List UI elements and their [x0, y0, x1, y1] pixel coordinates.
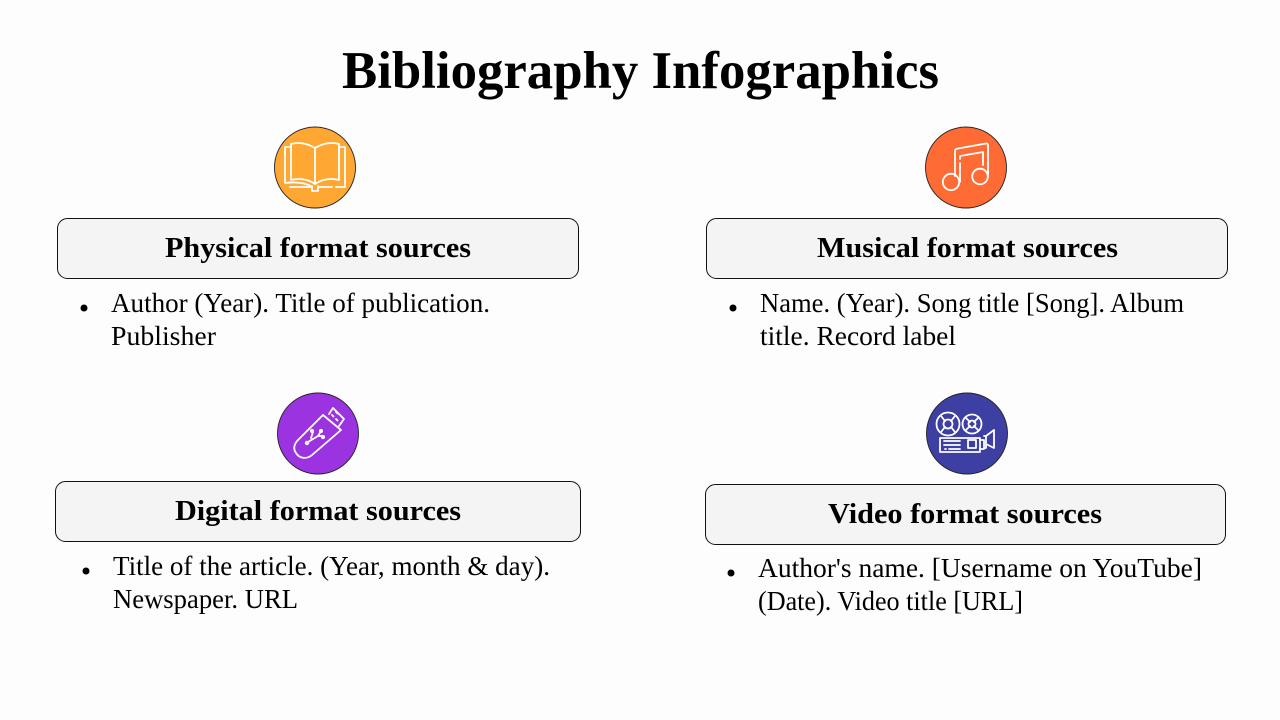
- heading box: Physical format sources: [165, 232, 471, 264]
- heading box: [56, 482, 580, 542]
- bullet text: (Date). Video title [URL]: [758, 586, 1023, 616]
- heading box: [706, 218, 1228, 278]
- panel: video format sources: [706, 393, 1226, 616]
- heading box: Musical format sources: [817, 232, 1118, 264]
- bullet text: Title of the article. (Year, month & day).: [113, 551, 550, 581]
- bullet text: Name. (Year). Song title [Song]. Album: [760, 288, 1184, 318]
- bullet text: [82, 551, 550, 614]
- bullet text: Author's name. [Username on YouTube]: [758, 553, 1202, 583]
- title: Bibliography Infographics: [342, 42, 939, 100]
- panel: digital format sources: [56, 393, 580, 614]
- panel: musical format sources: [706, 127, 1228, 351]
- panel: physical format sources: [58, 127, 578, 351]
- icon: film projector: [926, 393, 1008, 474]
- bullet text: Publisher: [111, 321, 216, 351]
- heading box: Video format sources: [828, 498, 1102, 530]
- bullet text: Author (Year). Title of publication.: [111, 288, 490, 318]
- bullet text: [730, 288, 1184, 351]
- icon: open book: [274, 127, 356, 208]
- heading box: [58, 218, 578, 278]
- bullet text: Newspaper. URL: [113, 584, 298, 614]
- icon: music notes: [926, 127, 1006, 208]
- bullet text: [728, 553, 1202, 616]
- icon: usb drive: [278, 393, 358, 474]
- heading box: [706, 484, 1226, 544]
- bullet text: [80, 288, 490, 351]
- bullet text: title. Record label: [760, 321, 956, 351]
- heading box: Digital format sources: [175, 495, 461, 527]
